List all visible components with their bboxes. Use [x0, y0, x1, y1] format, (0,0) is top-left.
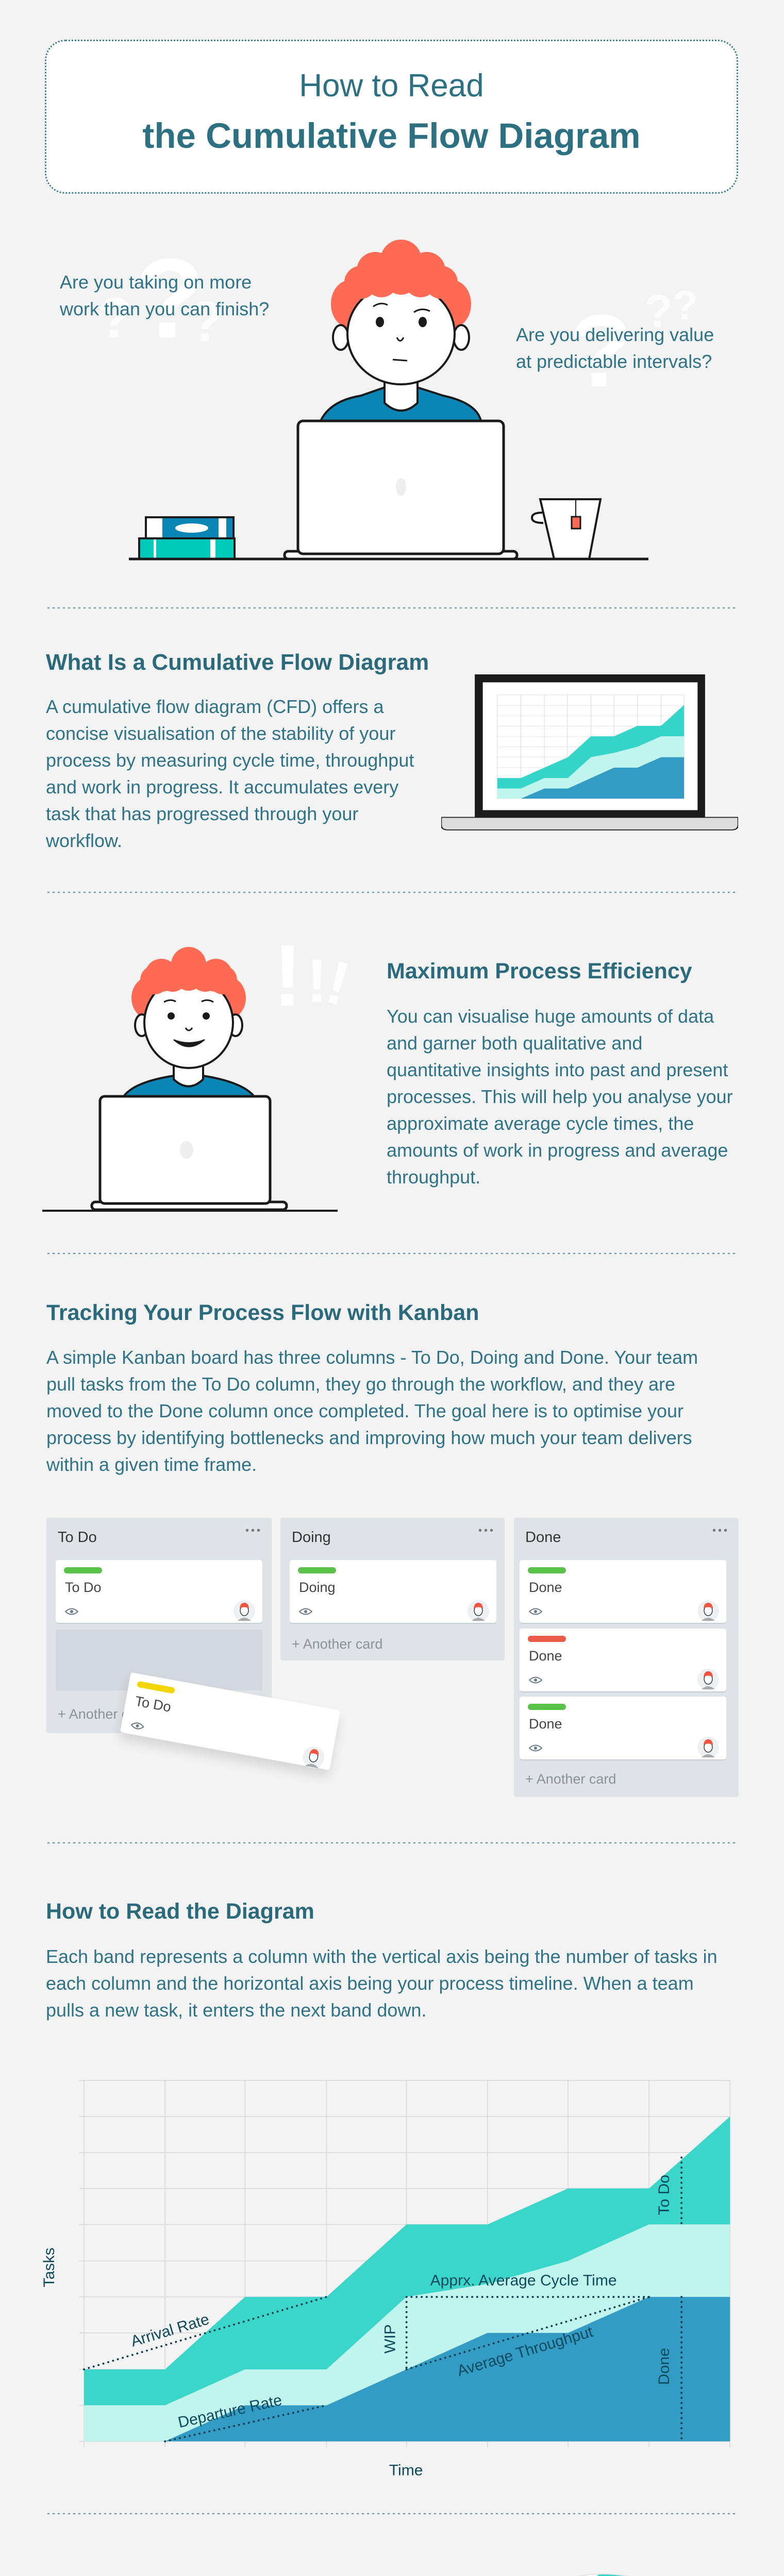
text: how to read: [46, 1946, 718, 2021]
card: doing: [290, 1560, 496, 1623]
question left: [60, 272, 269, 319]
hero illustration: [98, 235, 698, 561]
text: what is CFD: [46, 696, 414, 851]
heading: kanban: Tracking Your Process Flow with Kanban: [46, 1300, 479, 1325]
text: max efficiency: [387, 1006, 733, 1188]
illustration: happy character: [42, 927, 357, 1212]
header box: [45, 40, 738, 194]
text: kanban: moved to the Done column once completed. The goal here is to optimise your: [46, 1400, 683, 1421]
card: doing: Doing: [299, 1580, 336, 1595]
heading: what is CFD: What Is a Cumulative Flow Diagram: [46, 650, 429, 675]
question marks decoration: ?: [673, 282, 698, 328]
text: max efficiency: processes. This will help you analyse your: [387, 1086, 733, 1107]
exclamation marks: !: [307, 946, 327, 1015]
exclamation marks: !: [319, 947, 357, 1019]
main CFD chart: WIP: [381, 2324, 398, 2353]
text: max efficiency: quantitative insights into past and present: [387, 1059, 728, 1080]
kanban column: doing: Doing: [292, 1529, 331, 1546]
heading: how to read: How to Read the Diagram: [46, 1899, 314, 1924]
kanban column: done: + Another card: [525, 1771, 616, 1787]
text: kanban: pull tasks from the To Do column, they go through the workflow, and they are: [46, 1374, 675, 1395]
exclamation marks: !: [273, 927, 303, 1025]
laptop chart illustration: [441, 674, 738, 831]
question right: [516, 324, 714, 372]
text: what is CFD: and work in progress. It accumulates every: [46, 776, 398, 798]
main CFD chart: Apprx. Average Cycle Time: [430, 2272, 617, 2289]
main CFD chart: Done: [656, 2348, 673, 2385]
text: max efficiency: You can visualise huge amounts of data: [387, 1006, 714, 1027]
card: to do: [56, 1560, 262, 1623]
text: what is CFD: concise visualisation of the stability of your: [46, 723, 395, 744]
question marks decoration: ?: [570, 294, 632, 409]
cup: [532, 499, 600, 559]
card: done 3: Done: [529, 1716, 562, 1732]
dragged card: [120, 1672, 340, 1770]
kanban column: doing: [280, 1518, 505, 1660]
main CFD chart: Departure Rate: [176, 2392, 283, 2431]
card: done 1: Done: [529, 1580, 562, 1595]
question marks decoration: [98, 235, 698, 409]
text: kanban: process by identifying bottlenecks and improving how much your team delivers: [46, 1427, 692, 1448]
kanban column: doing: •••: [478, 1525, 495, 1536]
exclamation marks: [273, 927, 357, 1025]
text: what is CFD: A cumulative flow diagram (CFD) offers a: [46, 696, 384, 717]
question left: Are you taking on more: [60, 272, 252, 293]
question right: at predictable intervals?: [516, 351, 712, 372]
question right: Are you delivering value: [516, 324, 714, 345]
books: [139, 517, 235, 559]
text: max efficiency: and garner both qualitative and: [387, 1032, 642, 1054]
text: kanban: within a given time frame.: [46, 1454, 257, 1475]
laptop: [285, 421, 517, 559]
kanban column: to do: [46, 1518, 272, 1733]
card: done 3: [520, 1697, 726, 1759]
text: max efficiency: throughput.: [387, 1166, 480, 1188]
text: how to read: pulls a new task, it enters the next band down.: [46, 1999, 426, 2021]
question marks decoration: ?: [189, 290, 223, 353]
main CFD chart: To Do: [656, 2175, 673, 2215]
question marks decoration: ?: [644, 286, 673, 337]
text: what is CFD: process by measuring cycle time, throughput: [46, 750, 414, 771]
band: to do: [84, 2116, 730, 2405]
question marks decoration: ?: [135, 235, 204, 362]
dragged card: To Do: [134, 1693, 172, 1715]
kanban column: to do: + Another card: [58, 1706, 148, 1722]
heading: max efficiency: Maximum Process Efficiency: [387, 959, 692, 984]
main CFD chart: Tasks: [41, 2248, 58, 2287]
card: to do: To Do: [65, 1580, 102, 1595]
question marks decoration: ?: [98, 286, 132, 350]
kanban column: doing: + Another card: [292, 1636, 382, 1652]
title line 1: How to Read: [299, 68, 484, 104]
text: max efficiency: approximate average cycle times, the: [387, 1113, 694, 1134]
main CFD chart: [41, 2080, 730, 2479]
card: done 2: Done: [529, 1648, 562, 1664]
card: done 1: [520, 1560, 726, 1623]
band: doing: [84, 2225, 730, 2442]
text: kanban: [46, 1347, 698, 1475]
question left: work than you can finish?: [60, 298, 269, 319]
card: done 2: [520, 1629, 726, 1691]
character: [321, 240, 481, 421]
kanban column: done: Done: [525, 1529, 561, 1546]
kanban column: to do: •••: [245, 1525, 262, 1536]
text: what is CFD: task that has progressed through your: [46, 803, 358, 824]
circles for WIP & throughput: [577, 2573, 628, 2576]
circle: WIP zoom: [577, 2573, 628, 2576]
text: kanban: A simple Kanban board has three columns - To Do, Doing and Done. Your team: [46, 1347, 698, 1368]
text: max efficiency: amounts of work in progress and average: [387, 1140, 728, 1161]
main CFD chart: Time: [389, 2462, 423, 2479]
title line 2: the Cumulative Flow Diagram: [142, 116, 641, 156]
text: what is CFD: workflow.: [46, 830, 122, 851]
kanban column: done: •••: [712, 1525, 729, 1536]
main CFD chart: Average Throughput: [455, 2323, 595, 2380]
text: how to read: each column and the horizontal axis being your process timeline. When a team: [46, 1973, 694, 1994]
main CFD chart: Arrival Rate: [129, 2311, 211, 2350]
kanban column: done: [514, 1518, 739, 1797]
band: done: [165, 2297, 730, 2442]
kanban column: to do: To Do: [58, 1529, 97, 1546]
text: how to read: Each band represents a column with the vertical axis being the number of tasks in: [46, 1946, 718, 1967]
